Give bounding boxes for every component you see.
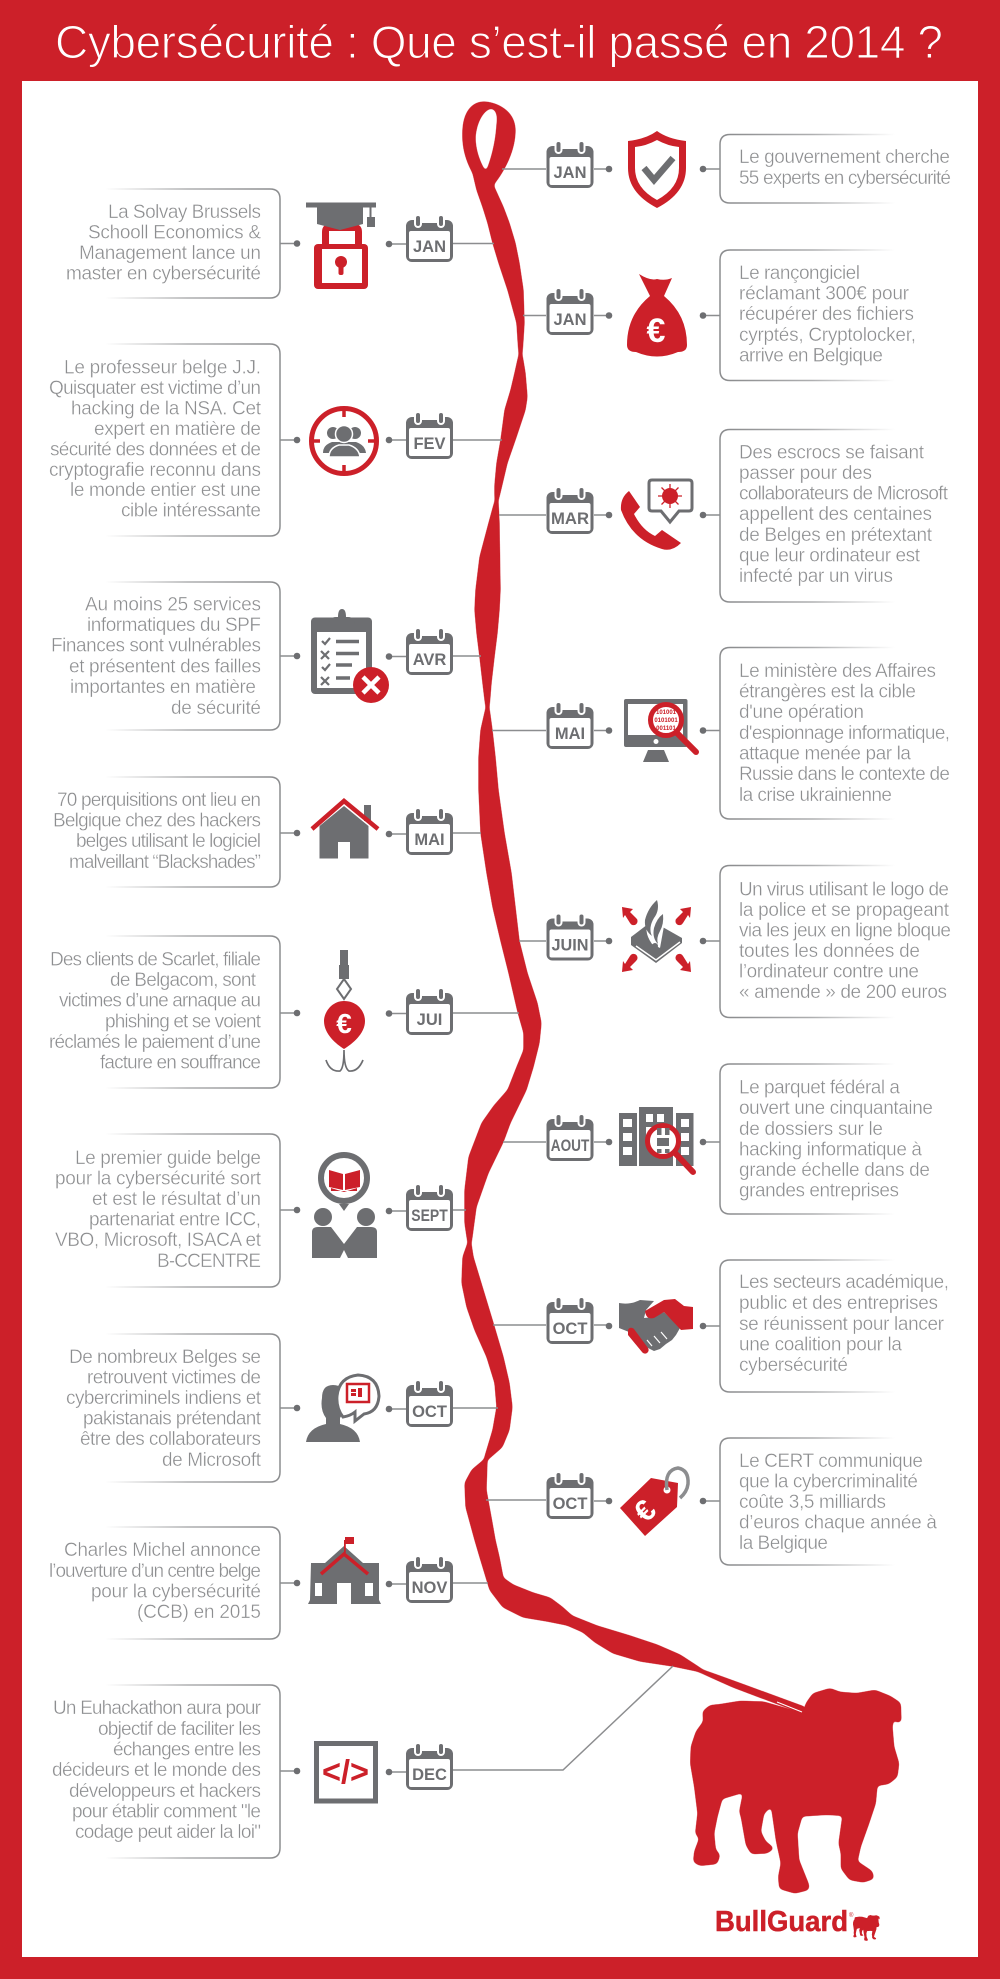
icon: shield check (628, 131, 686, 208)
description: attaque menée par la (739, 744, 911, 764)
description (55, 1148, 262, 1272)
description: cybercriminels indiens et (66, 1388, 262, 1409)
description: via les jeux en ligne bloque (739, 920, 951, 942)
description: partenariat entre ICC, (89, 1210, 261, 1230)
month: SEPT (406, 1185, 453, 1231)
left row 9: December hackathon (52, 1666, 673, 1858)
description: Management lance un (79, 243, 261, 264)
month: OCT (546, 1473, 594, 1519)
month: MAR: MAR (551, 510, 589, 528)
connectors (280, 1583, 488, 1584)
text box (105, 777, 280, 887)
month: MAR (546, 488, 594, 534)
description: se réunissent pour lancer (739, 1314, 945, 1335)
month: JAN (406, 216, 453, 262)
month: AVR (406, 629, 453, 675)
description: que leur ordinateur est (739, 546, 921, 566)
month: AOUT: AOUT (551, 1137, 589, 1155)
month: JAN: JAN (553, 311, 587, 329)
description: importantes en matière (70, 677, 256, 698)
description: « amende » de 200 euros (739, 982, 947, 1003)
description: d'une opération (739, 702, 864, 723)
description (53, 790, 261, 873)
description: Charles Michel annonce (64, 1540, 261, 1561)
connectors (280, 242, 494, 245)
description: d'espionnage informatique, (739, 723, 950, 744)
month: OCT: OCT (412, 1403, 447, 1421)
description: informatiques du SPF (87, 615, 261, 636)
description: l’ouverture d’un centre belge (49, 1561, 261, 1582)
month: JAN: JAN (553, 164, 587, 182)
icon: school building with flag (308, 1537, 381, 1604)
left row 1: January master (66, 189, 494, 298)
description: Les secteurs académique, (739, 1272, 949, 1293)
description: de Microsoft (162, 1450, 262, 1471)
description: collaborateurs de Microsoft (739, 484, 949, 504)
month: NOV: NOV (412, 1579, 447, 1597)
description: récupérer des fichiers (739, 304, 914, 325)
description: grandes entreprises (739, 1180, 899, 1202)
month: NOV (406, 1557, 453, 1603)
month: MAI (546, 703, 594, 749)
description: pour la cybersécurité sort (55, 1168, 262, 1190)
month: JUIN: JUIN (552, 936, 588, 954)
description (49, 950, 262, 1074)
description: objectif de faciliter les (98, 1719, 261, 1740)
icon: code window (316, 1744, 376, 1801)
month: OCT (546, 1298, 594, 1344)
description: Le parquet fédéral a (739, 1078, 900, 1098)
icon: checklist with red cross (311, 609, 389, 703)
left row 8: November CCB centre (49, 1527, 488, 1639)
right row 5: June police virus (519, 866, 951, 1018)
description: de sécurité (171, 698, 261, 719)
ribbon leash timeline (462, 102, 807, 1713)
description: La Solvay Brussels (108, 202, 261, 223)
description: arrive en Belgique (739, 346, 883, 366)
description: Un Euhackathon aura pour (53, 1698, 262, 1719)
icon: monitor with magnifier (624, 699, 696, 762)
connectors (493, 1325, 720, 1326)
description: Belgique chez des hackers (53, 810, 261, 832)
description (49, 358, 262, 522)
description (739, 263, 916, 366)
left row 7: October Indian cybercriminals (66, 1334, 498, 1482)
description: cible intéressante (121, 500, 261, 522)
description: pour la cybersécurité (91, 1582, 261, 1602)
description: décideurs et le monde des (52, 1760, 261, 1781)
description: ouvert une cinquantaine (739, 1098, 933, 1119)
month: FEV: FEV (413, 435, 446, 453)
month: MAI: MAI (555, 725, 585, 743)
title: Cybersécurité : Que s’est-il passé en 2014 ? (55, 16, 943, 68)
description: Des clients de Scarlet, filiale (50, 950, 261, 970)
description: de Belgacom, sont (110, 970, 257, 991)
icon: monitor with magnifier: 0101001 (654, 718, 678, 724)
description (52, 1698, 262, 1843)
description: la Belgique (739, 1533, 828, 1554)
description (739, 1078, 933, 1202)
icon: graduation cap padlock (306, 202, 376, 289)
description: d’euros chaque année à (739, 1512, 937, 1534)
icon: office buildings with magnifier (619, 1107, 694, 1172)
left row 2: February professor (49, 344, 502, 536)
text box (105, 936, 280, 1088)
left row 3: April SPF Finances (51, 582, 481, 730)
description: la police et se propageant (739, 900, 950, 921)
month: AOUT (546, 1115, 594, 1161)
description: cyrptés, Cryptolocker, (739, 325, 916, 346)
connectors and leader line (280, 1666, 673, 1772)
month: JAN (546, 142, 594, 188)
description: Des escrocs se faisant (739, 442, 925, 464)
month: AVR: AVR (413, 651, 446, 669)
month: JUIN (546, 914, 594, 960)
description: le monde entier est une (70, 480, 261, 501)
description: phishing et se voient (105, 1012, 262, 1032)
description: victimes d’une arnaque au (59, 990, 261, 1012)
month: FEV (406, 413, 453, 459)
description (49, 1540, 261, 1623)
description: de dossiers sur le (739, 1119, 883, 1140)
left row 4: May perquisitions (53, 777, 481, 887)
month: DEC (406, 1744, 453, 1790)
icon: money bag: € (647, 312, 666, 350)
description: Le premier guide belge (75, 1148, 261, 1169)
right row 1: January government (502, 131, 951, 208)
description: hacking informatique à (739, 1140, 922, 1160)
description: retrouvent victimes de (87, 1368, 261, 1388)
connectors (502, 168, 720, 170)
icon: code window: </> (322, 1753, 369, 1790)
description: grande échelle dans de (739, 1160, 930, 1181)
icon: handshake (619, 1299, 693, 1354)
connectors (503, 1141, 720, 1143)
description: 55 experts en cybersécurité (739, 168, 951, 189)
description: Le gouvernement cherche (739, 147, 950, 168)
icon: monitor with magnifier: 101001 (656, 710, 677, 716)
description: B-CCENTRE (157, 1251, 261, 1272)
text box (720, 134, 895, 203)
description: que la cybercriminalité (739, 1472, 918, 1492)
description: échanges entre les (113, 1740, 261, 1760)
description: l’ordinateur contre une (739, 962, 919, 982)
icon: house (312, 801, 378, 858)
description: codage peut aider la loi" (75, 1822, 261, 1843)
text box (105, 1527, 280, 1639)
description: (CCB) en 2015 (137, 1602, 261, 1623)
description (66, 202, 261, 284)
description: De nombreux Belges se (69, 1347, 261, 1368)
description: Au moins 25 services (85, 594, 261, 616)
description: facture en souffrance (100, 1052, 261, 1074)
description: Le CERT communique (739, 1451, 923, 1472)
text box (720, 648, 895, 819)
description: développeurs et hackers (69, 1781, 261, 1802)
description (66, 1347, 262, 1471)
connectors (519, 940, 720, 942)
month: OCT: OCT (553, 1495, 587, 1513)
description: et est le résultat d’un (92, 1189, 261, 1210)
month: JUI (406, 989, 453, 1035)
right row 6: August federal prosecutor (503, 1064, 933, 1214)
icon: phone and virus bubble (621, 480, 692, 550)
description: pour établir comment "le (72, 1802, 261, 1822)
description: infecté par un virus (739, 566, 893, 587)
description: et présentent des failles (69, 656, 261, 678)
description: Le professeur belge J.J. (64, 358, 261, 378)
description: cybersécurité (739, 1355, 848, 1376)
text box (105, 1334, 280, 1482)
icon: euro price tag: € (628, 1493, 663, 1529)
right row 4: May espionage (492, 648, 950, 819)
description: hacking de la NSA. Cet (71, 398, 262, 420)
text box (720, 250, 895, 380)
description: être des collaborateurs (80, 1429, 261, 1450)
description: public et des entreprises (739, 1293, 938, 1314)
text box (720, 866, 895, 1018)
icon: phishing lure: € (336, 1008, 352, 1039)
icon: phishing lure (324, 950, 365, 1071)
connectors (280, 1012, 519, 1014)
description: Un virus utilisant le logo de (739, 880, 949, 900)
description: belges utilisant le logiciel (76, 831, 261, 852)
right row 7: October coalition (493, 1260, 949, 1392)
icon: two people with book (312, 1155, 377, 1258)
description (739, 1272, 949, 1376)
description: réclamés le paiement d’une (49, 1032, 261, 1053)
month: SEPT: SEPT (411, 1207, 448, 1225)
description: Finances sont vulnérables (51, 636, 261, 656)
left row 6: September guide (55, 1134, 466, 1287)
month: JAN: JAN (413, 238, 446, 256)
description (51, 594, 261, 719)
description: une coalition pour la (739, 1334, 902, 1356)
right row 8: October cost (486, 1438, 937, 1565)
text box (105, 1134, 280, 1287)
text box (105, 582, 280, 730)
description: expert en matière de (94, 419, 261, 440)
text box (720, 1260, 895, 1392)
description (739, 147, 951, 189)
connectors (499, 514, 720, 516)
description: toutes les données de (739, 941, 920, 962)
month: JAN (546, 289, 594, 335)
text box (720, 1438, 895, 1565)
connectors (280, 1210, 466, 1211)
description: Le rançongiciel (739, 263, 860, 284)
description (739, 1451, 937, 1554)
month: OCT (406, 1381, 453, 1427)
BullGuard logo: ® (849, 1912, 854, 1919)
icon: caller with speech bubble (306, 1375, 379, 1442)
icon: flaming book with arrows (622, 900, 691, 972)
BullGuard bulldog (691, 1689, 901, 1893)
text box (720, 1064, 895, 1214)
description: sécurité des données et de (50, 440, 261, 460)
description: pakistanais prétendant (83, 1408, 262, 1430)
description: de Belges en prétextant (739, 525, 933, 546)
connectors (492, 730, 720, 732)
BullGuard logo: BullGuard (715, 1906, 848, 1938)
description: 70 perquisitions ont lieu en (57, 790, 261, 811)
description: Schooll Economics & (88, 222, 261, 244)
description: appellent des centaines (739, 504, 932, 525)
description: VBO, Microsoft, ISACA et (55, 1230, 262, 1251)
description: coûte 3,5 milliards (739, 1492, 886, 1513)
right row 3: March fake Microsoft (499, 430, 949, 602)
month: JUI: JUI (417, 1011, 442, 1029)
description: Le ministère des Affaires (739, 661, 936, 682)
connectors (486, 1500, 720, 1501)
month: MAI: MAI (414, 831, 445, 849)
text box (105, 189, 280, 298)
month: DEC: DEC (412, 1766, 447, 1784)
right row 2: January ransomware (523, 250, 916, 380)
text box (105, 1685, 280, 1858)
description (739, 880, 951, 1003)
connectors (280, 439, 502, 441)
icon: money bag (627, 274, 687, 356)
month: MAI (406, 809, 453, 855)
description: Russie dans le contexte de (739, 764, 950, 785)
description: malveillant “Blackshades” (69, 852, 261, 873)
description: la crise ukrainienne (739, 785, 892, 806)
icon: monitor with magnifier: 001101 (656, 726, 677, 732)
connectors (523, 314, 720, 316)
connectors (280, 833, 481, 834)
description: passer pour des (739, 463, 872, 484)
icon: target on people (311, 408, 377, 474)
connectors (280, 1408, 498, 1409)
text box (720, 430, 895, 602)
description (739, 442, 949, 587)
icon: euro price tag (620, 1468, 688, 1536)
description: étrangères est la cible (739, 682, 916, 702)
description (739, 661, 950, 806)
left row 5: July phishing (49, 936, 519, 1088)
description: cryptografie reconnu dans (49, 460, 261, 481)
text box (105, 344, 280, 536)
description: réclamant 300€ pour (739, 284, 910, 304)
connectors (280, 655, 481, 658)
month: OCT: OCT (553, 1320, 587, 1338)
description: master en cybersécurité (66, 264, 261, 284)
description: Quisquater est victime d’un (49, 378, 261, 399)
